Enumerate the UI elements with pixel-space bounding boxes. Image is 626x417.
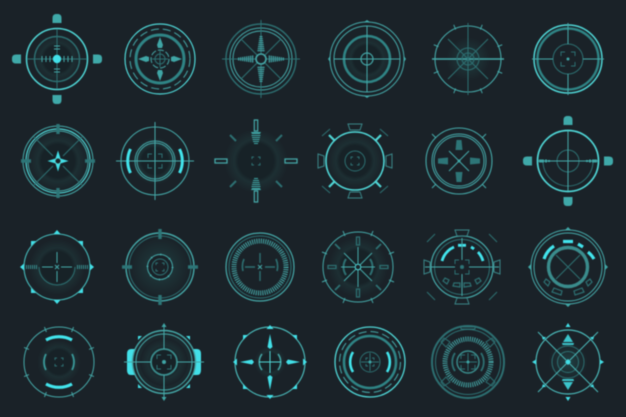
bright arcs bbox=[46, 337, 72, 387]
side boxes bbox=[215, 159, 297, 163]
bright side arcs bbox=[128, 149, 182, 173]
icon: reticle row 3 col 2 bbox=[122, 229, 198, 305]
icon: reticle row 1 col 3 bbox=[222, 20, 300, 98]
icon: reticle row 1 col 1 bbox=[12, 14, 102, 104]
icon: reticle row 2 col 1 bbox=[21, 124, 95, 198]
bright top arc segments bbox=[544, 242, 594, 259]
icon: reticle row 4 col 3 bbox=[233, 325, 307, 399]
spear arrows bbox=[138, 37, 182, 81]
tick ring bbox=[234, 241, 286, 293]
cardinal bars bbox=[21, 124, 95, 198]
lower boxes bbox=[443, 278, 481, 287]
icon: reticle row 3 col 1 bbox=[20, 230, 94, 304]
icon: reticle row 2 col 6 bbox=[523, 116, 613, 206]
knobs bbox=[12, 14, 102, 104]
spears bbox=[240, 334, 300, 390]
icon: reticle row 2 col 5 bbox=[426, 128, 492, 194]
wedges bbox=[438, 140, 480, 182]
icon: reticle row 1 col 5 bbox=[432, 23, 504, 95]
side plates bbox=[318, 124, 392, 198]
bright side arcs bbox=[350, 352, 390, 372]
rib wedges bbox=[238, 36, 284, 82]
centre dot bbox=[53, 55, 61, 63]
icon: reticle row 4 col 6 bbox=[532, 323, 604, 401]
icon: reticle row 1 col 4 bbox=[328, 20, 406, 98]
icon: reticle row 4 col 5 bbox=[432, 326, 504, 398]
bright top arc segments bbox=[442, 245, 483, 261]
side plates bbox=[127, 349, 201, 375]
tick ring bbox=[445, 339, 491, 385]
lower boxes bbox=[544, 279, 592, 295]
corner plates bbox=[441, 327, 495, 386]
outer ring bbox=[26, 28, 88, 90]
perimeter markers bbox=[233, 325, 307, 399]
icon: reticle row 4 col 4 bbox=[335, 327, 405, 397]
cardinal bars bbox=[122, 229, 198, 305]
horizontal ribs bbox=[539, 160, 597, 162]
centre star lines bbox=[341, 247, 375, 287]
icon: reticle row 4 col 2 bbox=[124, 323, 204, 401]
centre star bbox=[48, 150, 68, 172]
icon: reticle row 2 col 2 bbox=[116, 122, 194, 200]
centre diamond bbox=[565, 359, 571, 365]
icon: reticle row 4 col 1 bbox=[24, 327, 94, 397]
bars bbox=[328, 237, 388, 297]
stripes bbox=[26, 265, 88, 269]
icon: reticle row 3 col 3 bbox=[226, 233, 294, 301]
diagonal struts bbox=[329, 135, 381, 187]
icon: reticle row 2 col 3 bbox=[215, 120, 297, 202]
wedges bbox=[562, 334, 574, 390]
vertical stripe towers bbox=[254, 120, 258, 202]
icon: reticle row 1 col 2 bbox=[125, 24, 195, 94]
icon: reticle row 3 col 5 bbox=[424, 230, 500, 304]
icon: reticle row 2 col 4 bbox=[318, 124, 392, 198]
icon: reticle row 3 col 4 bbox=[322, 231, 394, 303]
icon: reticle row 1 col 6 bbox=[532, 23, 604, 95]
perimeter triangles bbox=[20, 230, 94, 304]
icon: reticle row 3 col 6 bbox=[528, 227, 608, 307]
